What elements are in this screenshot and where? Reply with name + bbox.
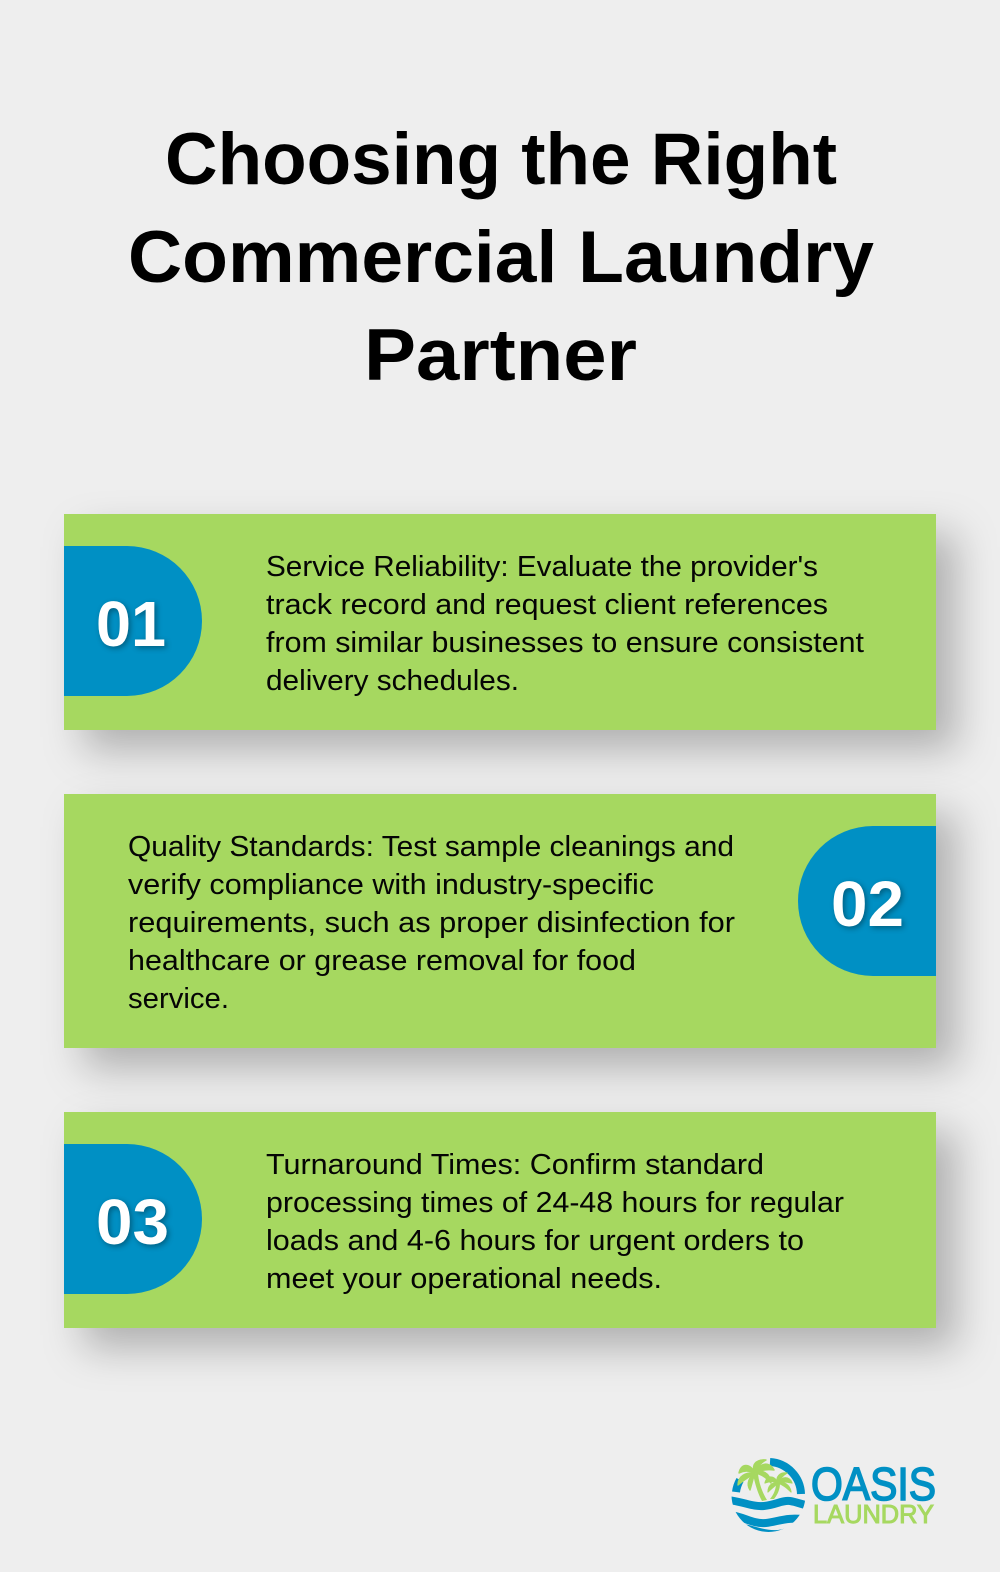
card background bbox=[64, 1112, 936, 1328]
icon: sun ring bbox=[736, 1462, 801, 1494]
text block: requirements, such as proper disinfection for bbox=[128, 907, 735, 939]
text block: Service Reliability: Evaluate the provider's bbox=[266, 551, 818, 583]
icon: small palm tree bbox=[765, 1473, 792, 1499]
panel: turnaround times bbox=[64, 1112, 936, 1328]
text block: processing times of 24-48 hours for regular bbox=[266, 1187, 844, 1219]
number badge 03 bbox=[64, 1144, 202, 1294]
number badge 01 bbox=[64, 546, 202, 696]
number 03: 03 bbox=[96, 1186, 169, 1258]
title: Commercial Laundry bbox=[128, 217, 874, 298]
text block: Quality Standards: Test sample cleanings and bbox=[128, 831, 734, 863]
title: Partner bbox=[364, 315, 637, 396]
text block: verify compliance with industry-specific bbox=[128, 869, 654, 901]
icon: waves bbox=[732, 1496, 805, 1532]
card background bbox=[64, 794, 936, 1048]
panel: quality standards bbox=[64, 794, 936, 1048]
text block: Turnaround Times: Confirm standard bbox=[266, 1149, 764, 1181]
text block bbox=[266, 551, 864, 697]
text block: loads and 4-6 hours for urgent orders to bbox=[266, 1225, 804, 1257]
text block: delivery schedules. bbox=[266, 665, 519, 697]
number 02: 02 bbox=[831, 868, 904, 940]
card background bbox=[64, 514, 936, 730]
text block: track record and request client references bbox=[266, 589, 828, 621]
text block: meet your operational needs. bbox=[266, 1263, 662, 1295]
text block bbox=[128, 831, 735, 1015]
logo wordmark: LAUNDRY: LAUNDRY bbox=[813, 1499, 934, 1529]
logo wordmark: OASIS: OASIS bbox=[811, 1458, 936, 1510]
text block bbox=[266, 1149, 844, 1295]
text block: healthcare or grease removal for food bbox=[128, 945, 636, 977]
title: Choosing the Right bbox=[165, 119, 837, 200]
text block: service. bbox=[128, 983, 229, 1015]
title bbox=[128, 119, 874, 396]
logo: Oasis Laundry bbox=[732, 1458, 935, 1532]
panel: service reliability bbox=[64, 514, 936, 730]
icon: large palm tree bbox=[738, 1460, 774, 1501]
number 01: 01 bbox=[96, 588, 166, 660]
number badge 02 bbox=[798, 826, 936, 976]
text block: from similar businesses to ensure consistent bbox=[266, 627, 864, 659]
